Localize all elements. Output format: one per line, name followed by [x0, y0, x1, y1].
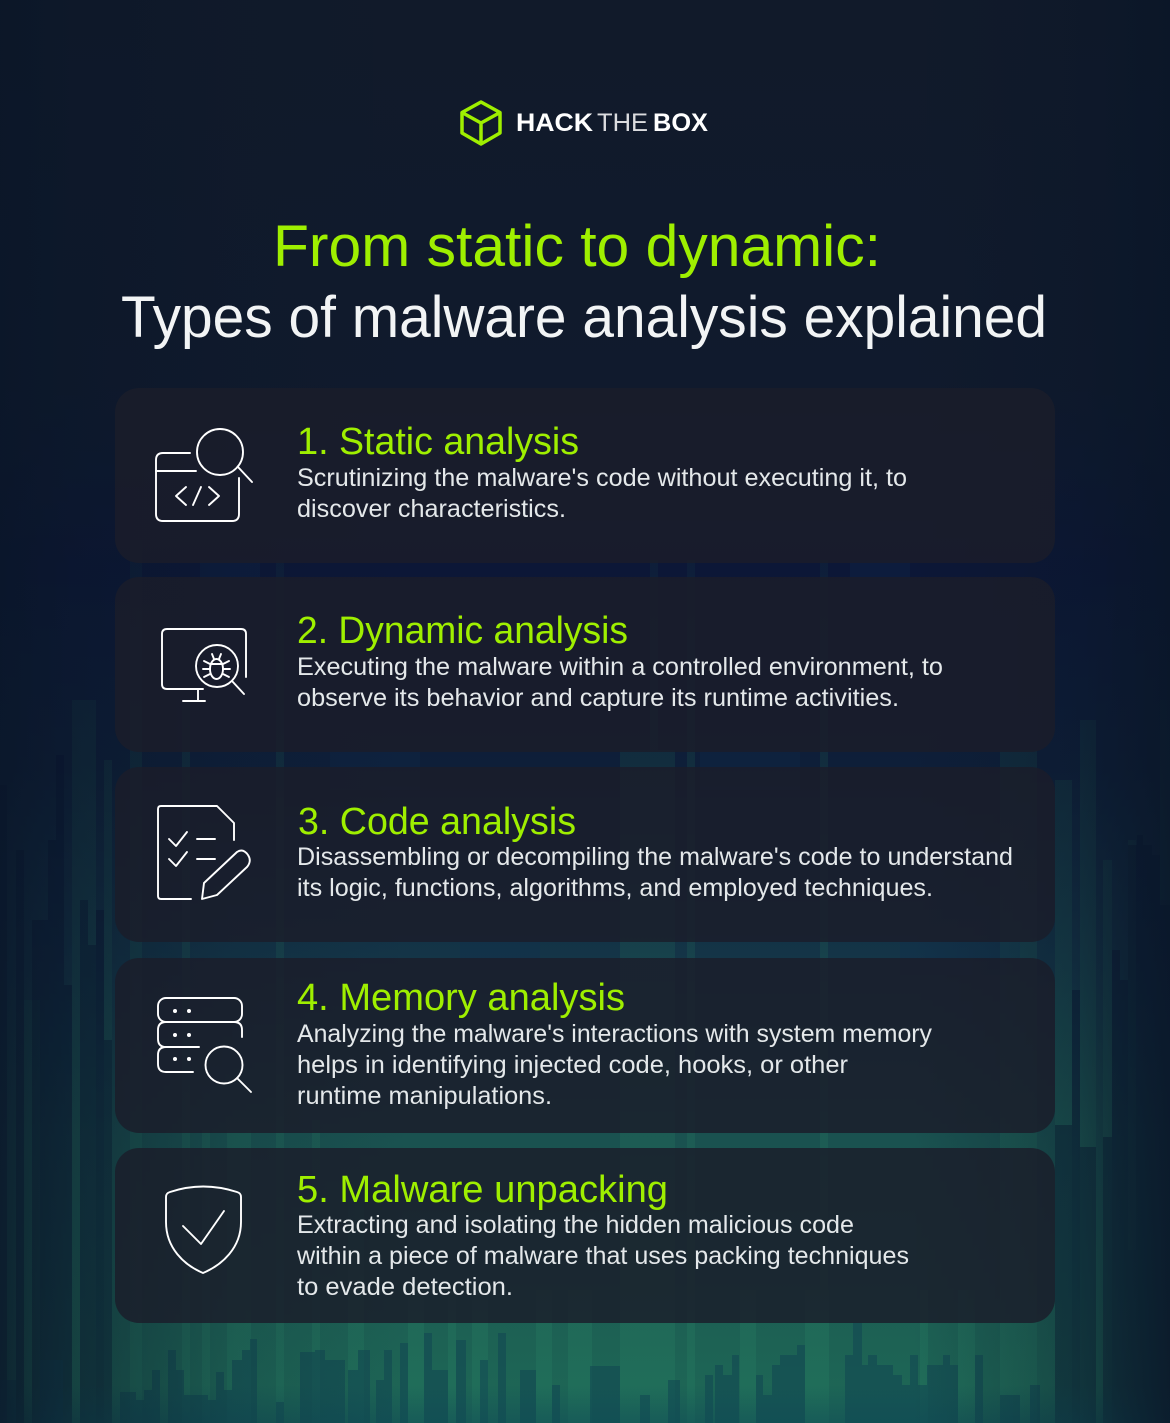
panel: memory analysis [115, 958, 1055, 1133]
icon: monitor with bug [162, 629, 246, 701]
wordmark: BOX [653, 109, 708, 137]
title: Types of malware analysis explained [121, 285, 1047, 350]
text block: Executing the malware within a controlled environment, to [297, 653, 943, 681]
text block: Disassembling or decompiling the malware's code to understand [297, 843, 1013, 871]
text block [296, 1211, 909, 1301]
heading: 4. Memory analysis [297, 977, 625, 1019]
heading: 5. Malware unpacking [297, 1169, 668, 1211]
text block [297, 464, 907, 523]
panel: dynamic analysis [115, 577, 1055, 752]
text block: observe its behavior and capture its runtime activities. [297, 684, 899, 712]
text block: to evade detection. [297, 1273, 513, 1301]
text block [297, 1020, 932, 1110]
icon: server with magnifier [158, 998, 251, 1092]
wordmark: HACK [516, 109, 593, 137]
wordmark: THE [597, 109, 648, 137]
panel: malware unpacking [115, 1148, 1055, 1323]
icon: hexagonal cube [462, 102, 500, 144]
icon: code window with magnifier [156, 429, 252, 521]
text block: Extracting and isolating the hidden malicious code [297, 1211, 854, 1239]
text block: Scrutinizing the malware's code without executing it, to [297, 464, 907, 492]
text block [297, 653, 943, 712]
panel: code analysis [115, 767, 1055, 942]
text block: Analyzing the malware's interactions with system memory [297, 1020, 932, 1048]
icon: shield with check [166, 1186, 241, 1273]
title [121, 214, 1047, 350]
text block [297, 843, 1013, 902]
text block: its logic, functions, algorithms, and employed techniques. [297, 874, 933, 902]
text block: within a piece of malware that uses packing techniques [296, 1242, 909, 1270]
icon: checklist with pencil [158, 806, 250, 899]
heading: 2. Dynamic analysis [297, 610, 628, 652]
heading: 1. [297, 421, 329, 463]
text block: helps in identifying injected code, hooks, or other [297, 1051, 848, 1079]
text block: runtime manipulations. [297, 1082, 552, 1110]
heading: Static analysis [339, 421, 579, 463]
title: From static to dynamic: [273, 214, 881, 279]
panel: static analysis [115, 388, 1055, 563]
logo [462, 102, 708, 144]
text block: discover characteristics. [297, 495, 566, 523]
heading: 3. Code analysis [298, 801, 576, 843]
